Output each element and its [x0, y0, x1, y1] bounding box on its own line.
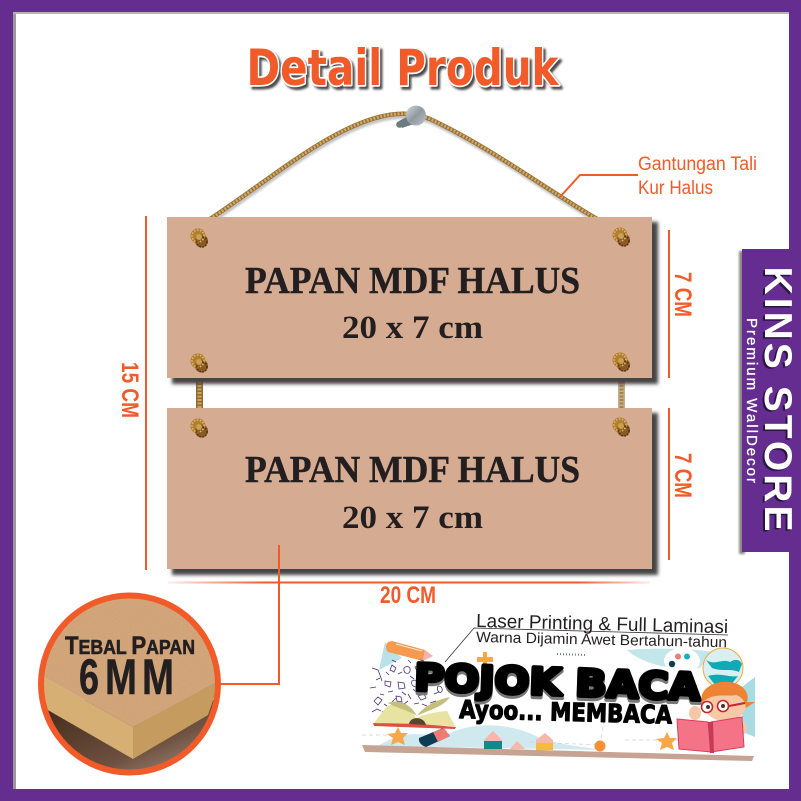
- banner: Pojok Baca: [362, 641, 755, 761]
- connecting ropes between boards: [196, 378, 625, 408]
- nail: [396, 106, 426, 128]
- rope label: Kur Halus: [638, 178, 713, 199]
- palette bubble: [664, 648, 700, 674]
- banner caption: Laser Printing & Full Laminasi: [476, 611, 728, 638]
- banner caption: Warna Dijamin Awet Bertahun-tahun: [476, 629, 727, 651]
- thickness detail circle: [38, 593, 222, 780]
- board 2: [167, 408, 658, 575]
- banner background shapes: [362, 642, 755, 750]
- thickness label: 6: [79, 649, 99, 705]
- board 1: [167, 217, 658, 384]
- brand tab: KINS STORE: [754, 268, 797, 533]
- brand tab: Premium WallDecor: [743, 318, 760, 483]
- board 2: 20 x 7 cm: [342, 500, 483, 536]
- banner caption: [445, 611, 728, 662]
- thickness label: M: [142, 649, 174, 705]
- thickness label: TEBAL PAPAN: [65, 632, 195, 660]
- title: Detail Produk: [249, 42, 562, 100]
- POJOK BACA headline: POJOK BACA: [414, 659, 701, 712]
- pencil: [386, 641, 433, 661]
- thickness label: [65, 632, 195, 705]
- rope label: Gantungan Tali: [638, 154, 757, 175]
- thickness label: M: [105, 649, 137, 705]
- board 1: PAPAN MDF HALUS: [245, 260, 580, 302]
- rope label: [560, 154, 757, 199]
- dimension: 20 cm: 20 CM: [380, 582, 436, 609]
- POJOK BACA headline: POJOK BACA: [414, 656, 701, 709]
- board 1: 20 x 7 cm: [342, 310, 483, 346]
- open book: [373, 697, 456, 729]
- brand tab: [739, 249, 801, 554]
- board 2: PAPAN MDF HALUS: [245, 449, 580, 491]
- shelf: [362, 745, 754, 761]
- dimension: 7 cm top: 7 CM: [669, 272, 696, 317]
- dimension: 15 cm: 15 CM: [116, 362, 143, 418]
- Ayoo Membaca subheading: Ayoo... MEMBACA: [459, 695, 673, 730]
- dimension: 7 cm bottom: 7 CM: [669, 453, 696, 498]
- leader to thickness detail: [219, 545, 279, 684]
- stars and school items: [387, 652, 677, 752]
- title: Detail Produk: [246, 39, 560, 97]
- globe: [703, 648, 743, 688]
- doodles: [370, 660, 445, 712]
- brand tab: KINS STORE: [756, 266, 799, 532]
- hanging rope: [210, 114, 598, 222]
- reading child: [677, 682, 755, 753]
